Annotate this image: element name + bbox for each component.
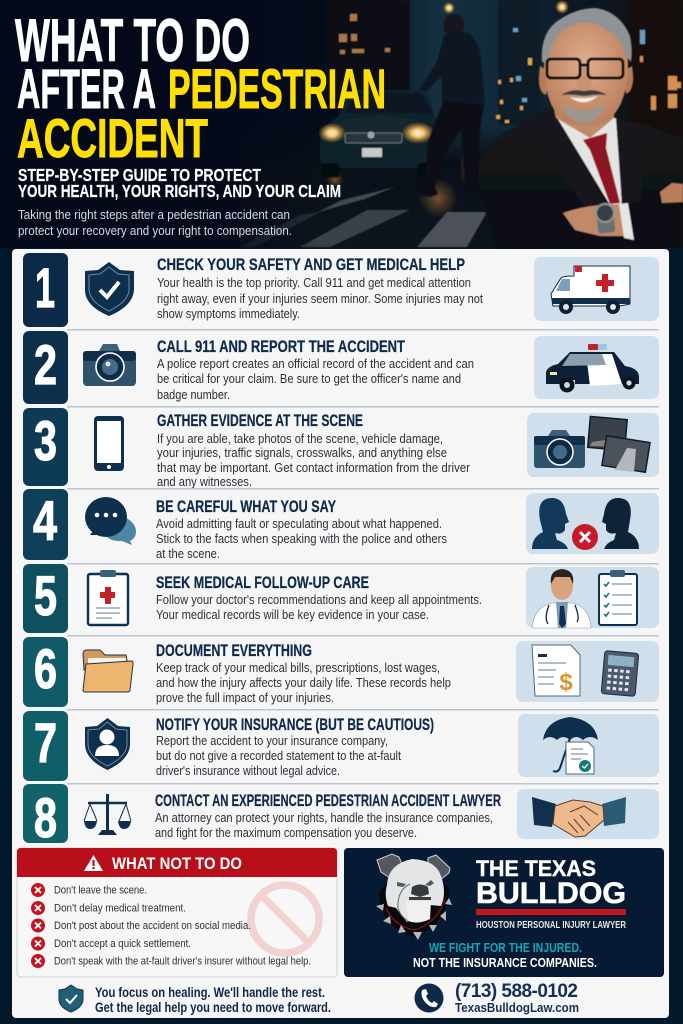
- tie: [583, 133, 620, 204]
- card: doctor and checklist: [526, 567, 659, 628]
- step 4 heading: BE CAREFUL WHAT YOU SAY: [156, 497, 336, 516]
- list item: [31, 954, 311, 968]
- title: [15, 7, 386, 169]
- attorney portrait: [478, 8, 683, 248]
- intro text: [18, 207, 292, 238]
- intro text: Taking the right steps after a pedestrian accident can: [18, 207, 290, 222]
- step 7 body: but do not give a recorded statement to the at-fault: [156, 748, 401, 763]
- step 8 number: [23, 784, 68, 849]
- list item: Don't speak with the at-fault driver's insurer without legal help.: [54, 956, 311, 968]
- card: umbrella and document: [518, 714, 659, 777]
- footer message: You focus on healing. We'll handle the rest.: [95, 984, 325, 1000]
- step 2 heading: CALL 911 AND REPORT THE ACCIDENT: [157, 337, 405, 356]
- brand wordmark: THE TEXAS: [476, 856, 596, 881]
- step 6: [23, 637, 659, 707]
- divider: [67, 329, 659, 330]
- smile: [570, 96, 598, 102]
- brand wordmark: HOUSTON PERSONAL INJURY LAWYER: [476, 920, 627, 931]
- step 6 body: and how the injury affects your daily life. These records help: [156, 675, 451, 690]
- wrist watch: [596, 204, 615, 234]
- divider: [67, 635, 659, 636]
- icon: shield with person: [85, 718, 130, 770]
- panel heading: WHAT NOT TO DO: [112, 854, 242, 873]
- intro text: protect your recovery and your right to compensation.: [18, 223, 292, 238]
- step 7 body: Report the accident to your insurance company,: [156, 733, 388, 748]
- step 8 body: [155, 810, 493, 840]
- step 4 body: [156, 516, 447, 561]
- shirt cuff: [619, 203, 634, 240]
- step 3 heading: GATHER EVIDENCE AT THE SCENE: [157, 411, 363, 430]
- step 2 body: [157, 356, 474, 402]
- step 7: [23, 711, 659, 781]
- tagline: [413, 940, 597, 970]
- what not to do panel: [17, 848, 337, 977]
- brow and eyes: [397, 880, 434, 887]
- contact block: TexasBulldogLaw.com: [455, 1000, 579, 1015]
- hair: [542, 8, 632, 62]
- divider: [67, 563, 659, 564]
- step 8: [23, 784, 659, 849]
- forearm: [563, 204, 624, 236]
- step 5 number: 5: [34, 564, 57, 627]
- suit jacket: [478, 108, 683, 248]
- icon: medical clipboard: [88, 570, 128, 625]
- list item: Don't leave the scene.: [54, 884, 147, 896]
- step 3 body: that may be important. Get contact information from the driver: [157, 460, 471, 475]
- step 3 number: 3: [34, 409, 57, 472]
- divider: [67, 488, 659, 490]
- icon: small shield: [59, 985, 83, 1012]
- step 8 heading: CONTACT AN EXPERIENCED PEDESTRIAN ACCIDENT LAWYER: [155, 791, 501, 810]
- card: ambulance: [534, 257, 659, 321]
- card: camera and photos: [527, 413, 659, 477]
- divider: [67, 709, 659, 710]
- step 3 body: your injuries, traffic signals, crosswalks, and anything else: [157, 445, 447, 460]
- street lamps: [443, 2, 455, 14]
- step 1 heading: CHECK YOUR SAFETY AND GET MEDICAL HELP: [157, 255, 465, 274]
- card: handshake: [517, 789, 659, 839]
- step 2: [23, 331, 659, 404]
- step 5 number: [23, 564, 68, 633]
- icon: smartphone: [94, 416, 124, 471]
- brand wordmark: [476, 856, 627, 931]
- city buildings and lights: [325, 0, 683, 135]
- header photo: night street with pedestrian, car and attorney: [0, 0, 683, 248]
- shirt: [556, 116, 622, 205]
- ears: [539, 66, 633, 95]
- step 3 number: [23, 408, 68, 486]
- list item: [31, 936, 191, 950]
- step 2 body: badge number.: [157, 387, 230, 402]
- goatee: [562, 103, 605, 124]
- icon: phone: [414, 984, 444, 1012]
- step 2 body: be critical for your claim. Be sure to get the officer's name and: [157, 371, 461, 386]
- title: PEDESTRIAN: [168, 57, 386, 120]
- tagline: WE FIGHT FOR THE INJURED.: [429, 940, 582, 955]
- left fade behind title: [0, 0, 320, 248]
- step 3 body: If you are able, take photos of the scene, vehicle damage,: [157, 431, 443, 446]
- icon: camera: [83, 344, 136, 386]
- contact block: (713) 588-0102: [455, 981, 578, 1002]
- watermark: prohibition sign: [251, 885, 319, 953]
- step 7 number: 7: [34, 711, 57, 774]
- brand wordmark: BULLDOG: [476, 877, 626, 910]
- ears: [377, 854, 402, 878]
- step 6 body: [156, 660, 451, 705]
- step 3 body: [157, 431, 471, 489]
- step 5 body: Your medical records will be key evidence in your case.: [156, 607, 429, 622]
- icon: speech bubbles: [85, 497, 136, 545]
- step 3 body: and any witnesses.: [157, 474, 252, 489]
- car headlights: [318, 122, 435, 144]
- step 5 body: [156, 592, 482, 622]
- step 7 heading: NOTIFY YOUR INSURANCE (BUT BE CAUTIOUS): [156, 715, 434, 734]
- step 5: [23, 564, 659, 633]
- card: police car: [534, 336, 659, 399]
- contact block: [414, 981, 579, 1015]
- step 6 body: prove the full impact of your injuries.: [156, 690, 334, 705]
- list item: [31, 883, 147, 897]
- title: WHAT TO DO: [15, 7, 250, 74]
- step 7 body: driver's insurance without legal advice.: [156, 763, 340, 778]
- jowl fold: [398, 884, 410, 921]
- head: [386, 859, 444, 922]
- face: [544, 18, 628, 126]
- step 1: [23, 253, 659, 327]
- card: bill and calculator: $: [559, 669, 573, 696]
- footer message: [59, 984, 331, 1015]
- list item: Don't post about the accident on social media.: [54, 920, 251, 932]
- step 1 body: right away, even if your injuries seem minor. Some injuries may not: [157, 291, 483, 306]
- step 8 number: 8: [34, 786, 57, 849]
- step 6 body: Keep track of your medical bills, prescriptions, lost wages,: [156, 660, 440, 675]
- collar spikes: [376, 898, 452, 940]
- step 2 number: 2: [34, 333, 57, 396]
- hand: [660, 183, 683, 203]
- title: AFTER A: [17, 57, 156, 120]
- lower jaw: [406, 901, 431, 923]
- step 8 body: and fight for the maximum compensation you deserve.: [155, 825, 417, 840]
- pedestrian silhouette: [409, 14, 485, 197]
- step 1 body: show symptoms immediately.: [157, 306, 300, 321]
- red header: [17, 848, 337, 877]
- step 7 body: [156, 733, 401, 778]
- list item: Don't accept a quick settlement.: [54, 938, 191, 950]
- collar stripe: [386, 900, 445, 930]
- step 8 body: An attorney can protect your rights, handle the insurance companies,: [155, 810, 493, 825]
- step 4 number: 4: [33, 489, 57, 552]
- icon: warning triangle: [84, 855, 103, 871]
- step 4 body: Stick to the facts when speaking with the police and others: [156, 531, 447, 546]
- logo: bulldog head with spiked collar: [376, 854, 452, 940]
- icon: folder: [83, 650, 133, 692]
- step 5 body: Follow your doctor's recommendations and keep all appointments.: [156, 592, 482, 607]
- subtitle: STEP-BY-STEP GUIDE TO PROTECT: [18, 165, 261, 185]
- divider: [67, 406, 659, 408]
- step 1 body: Your health is the top priority. Call 911 and get medical attention: [157, 275, 471, 290]
- neck: [552, 100, 615, 138]
- subtitle: [18, 165, 341, 201]
- glasses: [547, 59, 623, 78]
- icon: shield with check: [85, 262, 134, 316]
- step 3: [23, 408, 659, 489]
- list item: [31, 901, 186, 915]
- step 6 number: 6: [34, 637, 57, 700]
- card: two heads with red x: [526, 493, 659, 554]
- footer message: Get the legal help you need to move forward.: [95, 999, 331, 1015]
- divider: [67, 783, 659, 784]
- car: [320, 90, 438, 177]
- step 2 number: [23, 331, 68, 404]
- subtitle: YOUR HEALTH, YOUR RIGHTS, AND YOUR CLAIM: [18, 181, 341, 201]
- nose: [576, 65, 592, 89]
- tagline: NOT THE INSURANCE COMPANIES.: [413, 955, 597, 970]
- nose: [411, 884, 429, 897]
- list item: Don't delay medical treatment.: [54, 902, 186, 914]
- moustache: [561, 90, 607, 96]
- step 4 body: Avoid admitting fault or speculating about what happened.: [156, 516, 442, 531]
- card: bill and calculator: [516, 641, 659, 702]
- step 7 number: [23, 711, 68, 781]
- step 5 heading: SEEK MEDICAL FOLLOW-UP CARE: [156, 573, 369, 592]
- main white panel: [12, 249, 669, 1018]
- step 1 body: [157, 275, 483, 321]
- mouth: [409, 897, 431, 900]
- step 1 number: [23, 253, 68, 327]
- step 4 body: at the scene.: [156, 546, 220, 561]
- wet road: [240, 125, 530, 248]
- jacket lapels: [535, 108, 610, 214]
- step 2 body: A police report creates an official record of the accident and can: [157, 356, 474, 371]
- brand panel: The Texas Bulldog: [344, 848, 664, 977]
- step 6 heading: DOCUMENT EVERYTHING: [156, 641, 312, 660]
- list item: [31, 918, 251, 932]
- icon: scales of justice: [84, 794, 131, 835]
- warm road reflections: [326, 141, 476, 218]
- title: ACCIDENT: [17, 107, 208, 169]
- step 6 number: [23, 637, 68, 707]
- step 4: [23, 489, 659, 561]
- step 1 number: 1: [35, 256, 55, 319]
- collar: [379, 880, 450, 937]
- step 4 number: [23, 489, 68, 560]
